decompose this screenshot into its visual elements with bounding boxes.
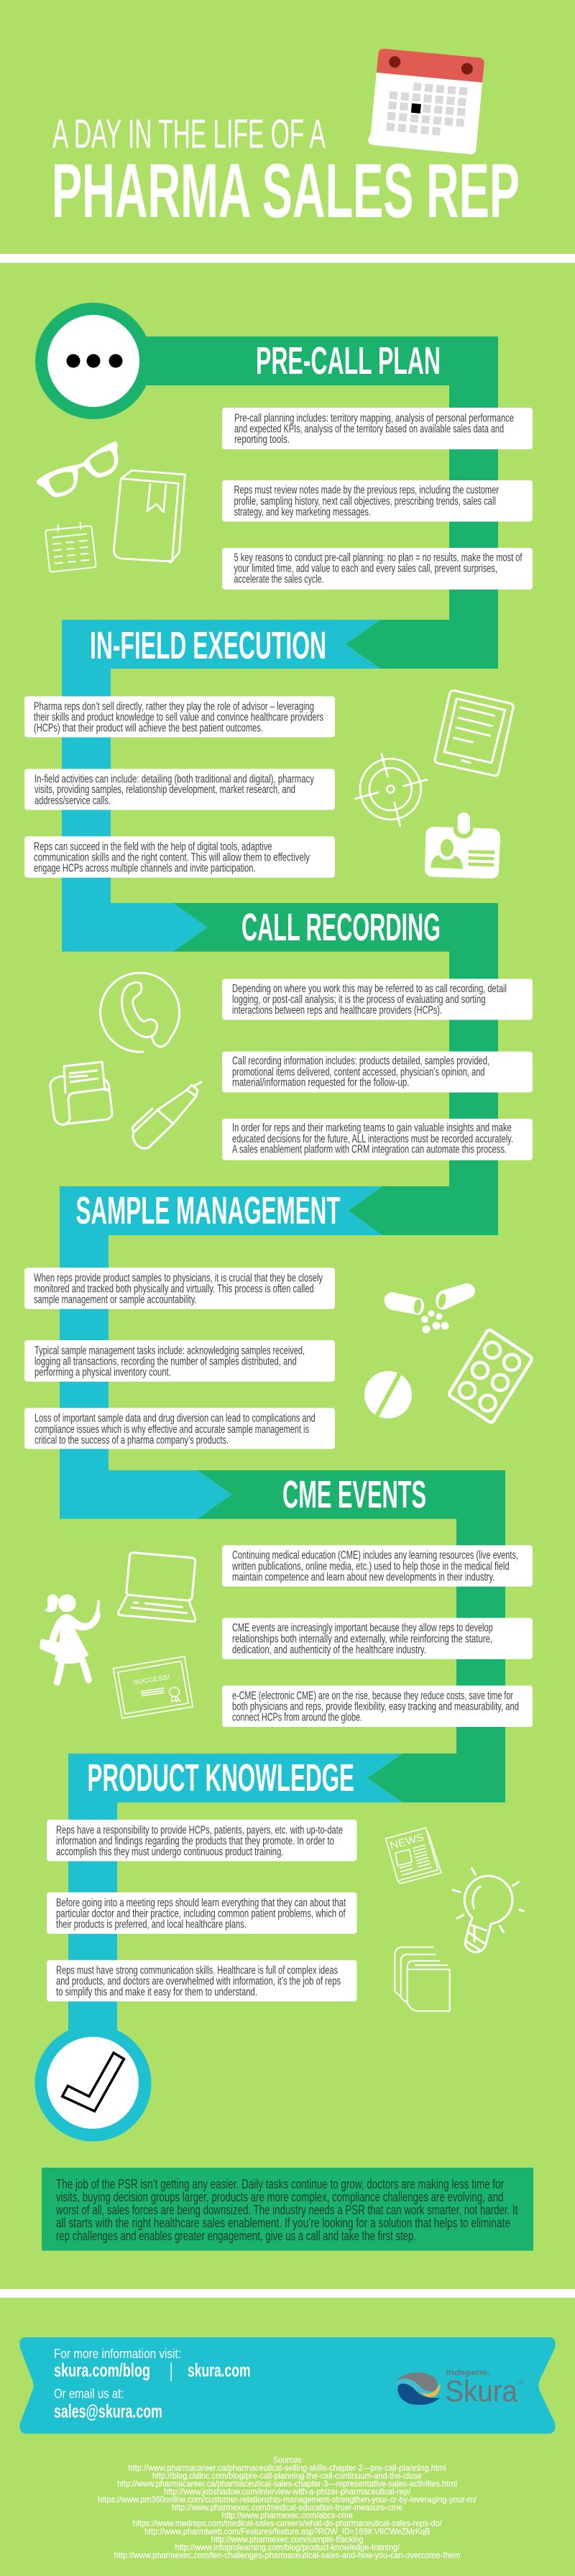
icon: newspaper: NEWS bbox=[389, 1832, 426, 1852]
card: call recording 3 bbox=[222, 1119, 533, 1160]
card: CME 3: connect HCPs from around the globe. bbox=[232, 1711, 362, 1724]
footer banner: sales@skura.com bbox=[54, 2400, 162, 2421]
card: product knowledge 3 bbox=[47, 1960, 356, 2002]
icon: small calendar bbox=[45, 523, 96, 572]
card: pre-call 1 bbox=[222, 408, 533, 449]
card: in-field 1: their skills and product knowledge to sell value and convince healthcare providers bbox=[34, 712, 323, 723]
logo: indegene skura: Skura bbox=[445, 2374, 518, 2408]
path: in-field execution band bbox=[62, 620, 380, 952]
text block: sources: http://www.pharmexec.com/ten-challenges-pharmaceutical-sales-and-how-you-can-overcome-them bbox=[114, 2550, 461, 2560]
card: product knowledge 2: Before going into a meeting reps should learn everything that they can about that bbox=[56, 1897, 346, 1909]
icon: speech dots circle bbox=[35, 303, 152, 419]
heading: pre-call plan: PRE-CALL PLAN bbox=[256, 339, 441, 382]
text block: sources bbox=[98, 2454, 477, 2560]
card: call recording 2: promotional items delivered, content accessed, physician’s opinion, and bbox=[232, 1066, 484, 1078]
card: product knowledge 3: to simplify this and make it easy for them to understand. bbox=[56, 1986, 257, 1998]
card: sample management 3: Loss of important sample data and drug diversion can lead to complications and bbox=[34, 1413, 316, 1425]
icon: blister pack bbox=[449, 1330, 532, 1422]
heading: in-field execution: IN-FIELD EXECUTION bbox=[90, 624, 326, 667]
card: call recording 1 bbox=[222, 979, 533, 1019]
footer banner bbox=[19, 2337, 556, 2434]
icon: check mark circle bbox=[34, 2025, 151, 2141]
text block: sources: https://www.medreps.com/medical-sales-careers/what-do-pharmaceutical-sales-reps-do/ bbox=[133, 2518, 442, 2529]
card: sample management 2: logging all transactions, recording the number of samples distributed, and bbox=[34, 1356, 297, 1368]
card: sample management 1: sample management or sample accountability. bbox=[34, 1294, 197, 1306]
card: call recording 1: interactions between reps and healthcare providers (HCPs). bbox=[232, 1004, 442, 1017]
card: CME 2: relationships both internally and externally, while reinforcing the stature, bbox=[232, 1633, 492, 1645]
card: product knowledge 2: their products is preferred, and local healthcare plans. bbox=[56, 1918, 247, 1930]
icon: wall calendar bbox=[368, 48, 484, 155]
card: sample management 2: performing a physical inventory count. bbox=[34, 1367, 171, 1379]
card: in-field 2: In-field activities can include: detailing (both traditional and digital), pharmacy bbox=[34, 773, 314, 785]
card: product knowledge 2 bbox=[47, 1892, 356, 1934]
card: in-field 3: engage HCPs across multiple channels and invite participation. bbox=[34, 863, 256, 875]
footer banner: skura.com bbox=[188, 2360, 250, 2381]
card: in-field 3 bbox=[24, 836, 335, 878]
title bbox=[52, 111, 520, 234]
icon: pen bbox=[132, 1082, 201, 1148]
card: in-field 1 bbox=[24, 696, 335, 738]
text block: sources: http://www.pharmacareer.ca/pharmaceutical-sales-chapter-3---representative-sales-activities.html bbox=[117, 2479, 457, 2489]
card: product knowledge 1: accomplish this they must undergo continuous product training. bbox=[56, 1846, 283, 1858]
heading: product knowledge: PRODUCT KNOWLEDGE bbox=[88, 1756, 354, 1800]
text block: sources: http://www.pharmexec.com/medical-education-truer-measure-cme bbox=[172, 2503, 402, 2513]
icon: newspaper bbox=[386, 1828, 441, 1884]
icon: laptop bbox=[119, 1553, 196, 1621]
icon: woman with bag bbox=[40, 1594, 101, 1682]
card: in-field 2: visits, providing samples, relationship development, market research, and bbox=[34, 784, 295, 796]
path: sample management band bbox=[60, 1186, 382, 1519]
card: sample management 1: When reps provide product samples to physicians, it is crucial that they be closely bbox=[34, 1272, 323, 1284]
icon: capsule and pills bbox=[384, 1283, 475, 1333]
text block: sources: http://www.jobshadow.com/interview-with-a-phizer-pharmaceutical-rep/ bbox=[164, 2487, 411, 2497]
logo: indegene skura: TM bbox=[517, 2380, 524, 2385]
card: sample management 1 bbox=[24, 1268, 335, 1309]
card: pre-call 3 bbox=[222, 548, 533, 590]
card: call recording 2 bbox=[222, 1051, 533, 1093]
card: pre-call 1: reporting tools. bbox=[234, 434, 290, 446]
icon: book bbox=[114, 470, 185, 563]
callout: closing statement bbox=[42, 2168, 533, 2250]
path: call recording band bbox=[173, 903, 498, 1235]
text block: sources: http://www.pharmacareer.ca/pharmaceutical-selling-skills-chapter-2---pre-call-planning.html bbox=[128, 2463, 446, 2473]
card: CME 1 bbox=[222, 1545, 533, 1587]
card: sample management 2 bbox=[24, 1340, 335, 1382]
card: product knowledge 3: and products, and doctors are overwhelmed with information, it’s the job of reps bbox=[56, 1976, 341, 1987]
text block: sources: https://www.pm360online.com/customer-relationship-management-strengthen-your-cr-by-leveraging-your-rn/ bbox=[98, 2495, 477, 2505]
card: sample management 2: Typical sample management tasks include: acknowledging samples received, bbox=[34, 1344, 305, 1357]
card: pre-call 2 bbox=[222, 480, 533, 522]
icon: light bulb bbox=[453, 1869, 524, 1952]
card: in-field 2 bbox=[24, 769, 335, 810]
icon: fax bbox=[50, 1062, 112, 1124]
card: product knowledge 1: Reps have a responsibility to provide HCPs, patients, payers, etc. with up-to-date bbox=[56, 1824, 343, 1836]
card: sample management 3: compliance issues which is why effective and accurate sample management is bbox=[34, 1424, 309, 1436]
path: pre-call plan band bbox=[147, 336, 498, 669]
footer banner: Or email us at: bbox=[54, 2387, 124, 2401]
path: product knowledge band bbox=[68, 1754, 402, 2042]
heading: sample management: SAMPLE MANAGEMENT bbox=[76, 1189, 341, 1232]
icon: tablet pill bbox=[364, 1371, 412, 1418]
icon: target bbox=[355, 753, 427, 825]
icon: success certificate bbox=[113, 1656, 193, 1718]
text block: sources: Sources bbox=[273, 2454, 302, 2465]
card: sample management 3 bbox=[24, 1408, 335, 1449]
card: in-field 1: Pharma reps don’t sell directly, rather they play the role of advisor – leveraging bbox=[34, 700, 314, 712]
card: product knowledge 2: particular doctor and their practice, including common patient problems, which of bbox=[56, 1907, 346, 1920]
text block: sources: http://www.infoprolearning.com/blog/product-knowledge-training/ bbox=[175, 2542, 400, 2552]
card: CME 2: dedication, and authenticity of the healthcare industry. bbox=[232, 1644, 426, 1656]
card: sample management 3: critical to the success of a pharma company’s products. bbox=[34, 1434, 229, 1447]
logo: indegene skura: indegene. bbox=[446, 2368, 490, 2377]
card: in-field 2: address/service calls. bbox=[34, 795, 111, 807]
title: A DAY IN THE LIFE OF A bbox=[52, 111, 326, 157]
card: pre-call 3: accelerate the sales cycle. bbox=[234, 574, 323, 585]
card: in-field 3: communication skills and the right content. This will allow them to effectively bbox=[34, 851, 310, 863]
footer banner: For more information visit: bbox=[54, 2347, 181, 2361]
callout: closing statement: rep challenges and enables greater engagement, give us a call and take the first step. bbox=[56, 2229, 416, 2243]
card: pre-call 2: strategy, and key marketing messages. bbox=[234, 506, 371, 518]
text block: sources: http://blog.cldinc.com/blog/pre-call-planning-the-call-continuum-and-the-close bbox=[152, 2471, 422, 2481]
text block: sources: http://www.pharmexec.com/sample-tracking bbox=[211, 2534, 364, 2544]
icon: telephone bbox=[101, 973, 180, 1052]
text block: sources: http://www.pharmexec.com/abcs-cme bbox=[222, 2511, 353, 2521]
icon: id badge bbox=[425, 812, 500, 879]
card: in-field 1: (HCPs) that their product will achieve the best patient outcomes. bbox=[34, 722, 263, 735]
icon: tablet bbox=[435, 690, 513, 776]
card: CME 2 bbox=[222, 1618, 533, 1659]
card: sample management 1: monitored and tracked both physically and virtually. This process is often called bbox=[34, 1283, 314, 1295]
card: product knowledge 1 bbox=[47, 1820, 356, 1861]
icon: success certificate: SUCCESS! bbox=[132, 1673, 170, 1686]
icon: glasses bbox=[37, 441, 118, 497]
card: call recording 2: material/information requested for the follow-up. bbox=[232, 1077, 410, 1089]
path: CME events band bbox=[197, 1470, 505, 1802]
card: product knowledge 1: information and findings regarding the products that they promote. In order to bbox=[56, 1835, 334, 1848]
card: CME 3 bbox=[222, 1685, 533, 1727]
card: in-field 3: Reps can succeed in the field with the help of digital tools, adaptive bbox=[34, 840, 272, 853]
card: product knowledge 3: Reps must have strong communication skills. Healthcare is full of complex ideas bbox=[56, 1964, 338, 1977]
logo: indegene skura bbox=[397, 2368, 524, 2408]
heading: CME events: CME EVENTS bbox=[282, 1473, 426, 1516]
text block: sources: http://www.pharmiweb.com/Features/feature.asp?ROW_ID=169#.V8CWeZMrKqB bbox=[144, 2526, 431, 2536]
footer banner: skura.com/blog bbox=[54, 2360, 150, 2381]
card: call recording 1: logging, or post-call analysis; it is the process of evaluating and sorting bbox=[232, 994, 486, 1006]
icon: stack of books bbox=[395, 1947, 450, 2011]
